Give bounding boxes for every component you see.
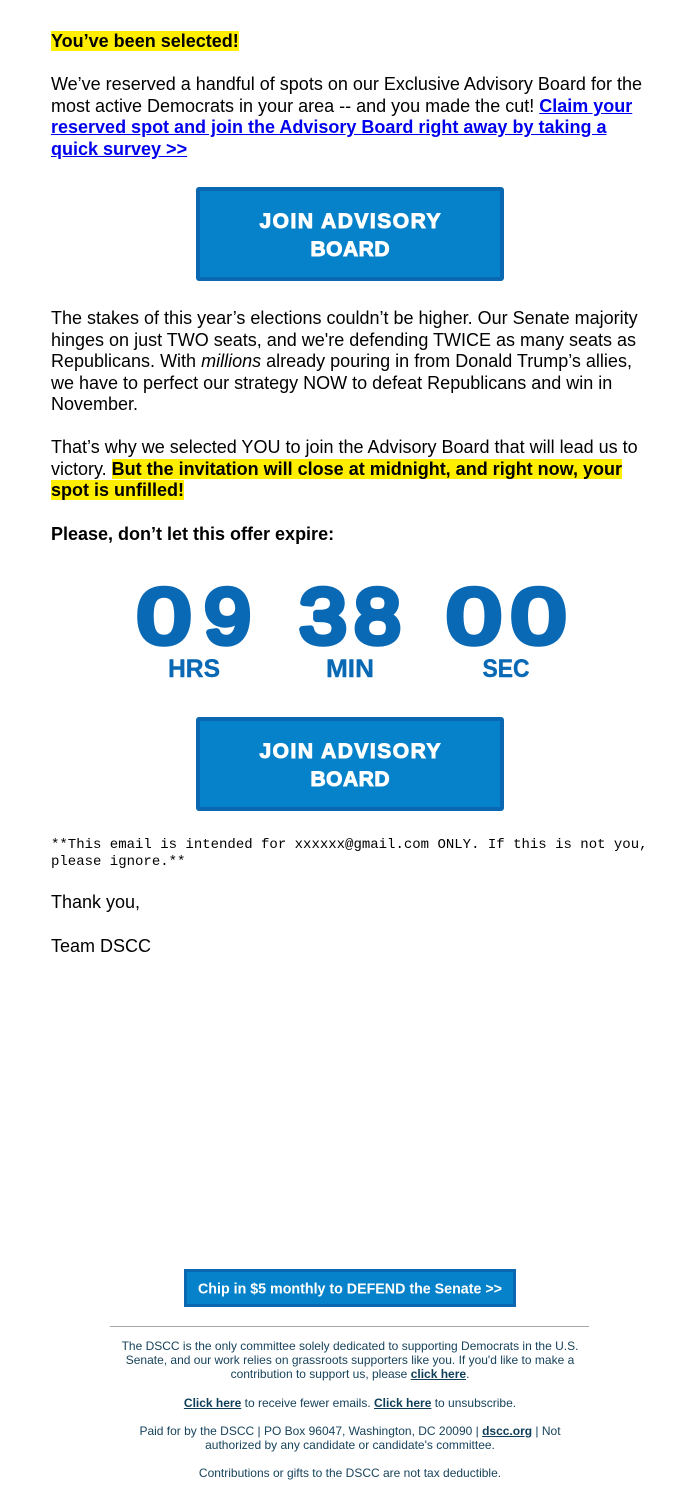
countdown: minutes: 3 [300, 574, 346, 660]
heading: selected notice: You’ve been selected! [51, 31, 239, 51]
text block: stakes: Republicans. With millions already pouring in from Donald Trump’s allies, [51, 351, 632, 371]
text block: signature: Team DSCC [51, 936, 151, 956]
text block: invitation [51, 74, 642, 159]
button: join advisory board top: JOIN ADVISORY [260, 210, 440, 233]
text block: invitation: We’ve reserved a handful of spots on our Exclusive Advisory Board for the [51, 74, 642, 94]
text block: deadline: That’s why we selected YOU to join the Advisory Board that will lead us to [51, 437, 638, 457]
text block: stakes: we have to perfect our strategy NOW to defeat Republicans and win in [51, 373, 612, 393]
text block: stakes: November. [51, 394, 138, 414]
countdown: seconds: 0 [512, 574, 566, 660]
button: join advisory board bottom: JOIN ADVISORY [260, 740, 440, 763]
footer: about DSCC: Senate, and our work relies on grassroots supporters like you. If you'd like to make a [126, 1353, 574, 1367]
countdown timer [137, 574, 566, 683]
countdown: seconds [447, 574, 566, 683]
countdown: hours: 9 [204, 574, 250, 660]
footer: about DSCC: contribution to support us, please click here. [231, 1367, 469, 1381]
countdown: hours: HRS [168, 655, 220, 683]
button: join advisory board top: BOARD [310, 238, 390, 261]
text block: invitation: reserved spot and join the Advisory Board right away by taking a [51, 117, 606, 137]
footer: email preferences: Click here to receive fewer emails. Click here to unsubscribe. [184, 1396, 516, 1410]
countdown: hours [138, 574, 250, 683]
text block: invitation: quick survey >> [51, 139, 187, 159]
button: chip in [184, 1269, 516, 1307]
button: join advisory board bottom [196, 717, 504, 811]
text block: stakes [51, 308, 638, 414]
button: join advisory board bottom: BOARD [310, 768, 390, 791]
text block: stakes: The stakes of this year’s elections couldn’t be higher. Our Senate majority [51, 308, 638, 328]
countdown: minutes: MIN [326, 655, 374, 683]
text block: deadline [51, 437, 638, 500]
text block: email notice: please ignore.** [51, 854, 185, 870]
countdown: minutes: 8 [354, 574, 400, 660]
countdown: seconds: 0 [447, 574, 501, 660]
countdown: minutes [300, 574, 400, 683]
footer: paid for by: Paid for by the DSCC | PO Box 96047, Washington, DC 20090 | dscc.org | Not [139, 1424, 561, 1438]
text block: deadline: victory. But the invitation will close at midnight, and right now, your [51, 459, 622, 479]
text block: invitation: most active Democrats in your area -- and you made the cut! Claim your [51, 96, 632, 116]
footer: tax notice: Contributions or gifts to the DSCC are not tax deductible. [199, 1466, 501, 1480]
footer: about DSCC [122, 1339, 578, 1381]
text block: thank you: Thank you, [51, 892, 140, 912]
countdown: hours: 0 [138, 574, 190, 660]
footer: paid for by: authorized by any candidate or candidate's committee. [205, 1438, 495, 1452]
button: chip in: Chip in $5 monthly to DEFEND the Senate >> [198, 1280, 502, 1298]
countdown: seconds: SEC [482, 655, 530, 683]
text block: deadline: spot is unfilled! [51, 480, 184, 500]
text block: call to act: Please, don’t let this offer expire: [51, 524, 334, 544]
button: join advisory board top [196, 187, 504, 281]
text block: email notice [51, 837, 648, 870]
footer: about DSCC: The DSCC is the only committee solely dedicated to supporting Democrats in the U.S. [122, 1339, 578, 1353]
footer: paid for by [139, 1424, 561, 1452]
text block: stakes: hinges on just TWO seats, and we're defending TWICE as many seats as [51, 330, 636, 350]
text block: email notice: **This email is intended for xxxxxx@gmail.com ONLY. If this is not you, [51, 837, 648, 853]
